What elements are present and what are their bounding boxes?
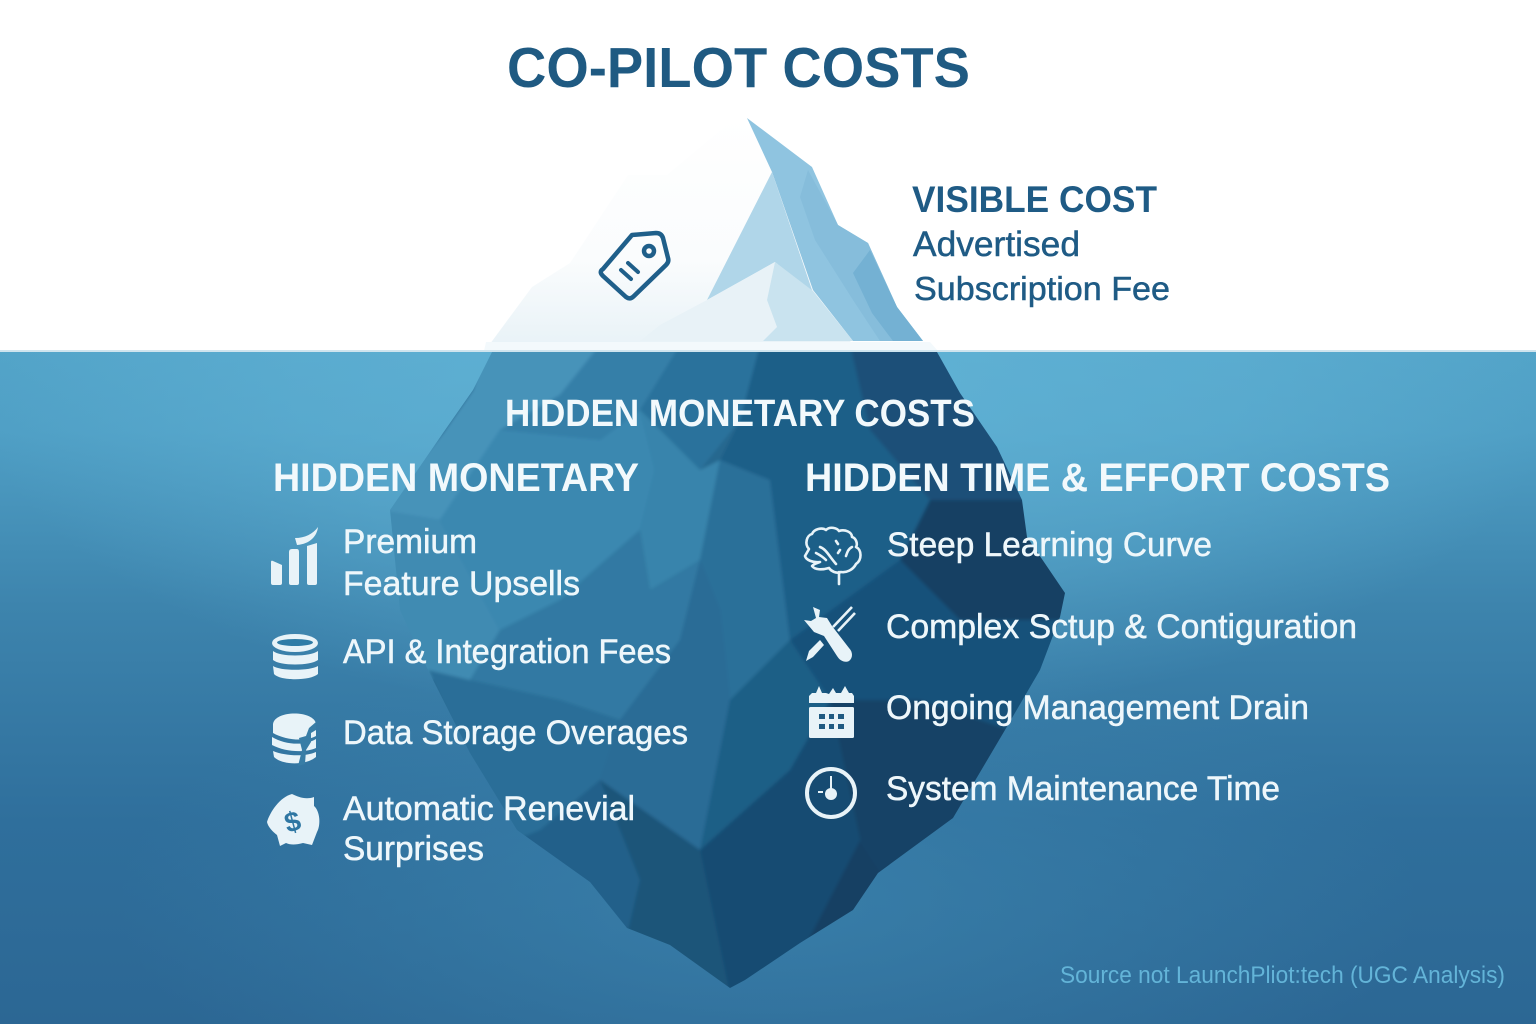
heading: hidden monetary: HIDDEN MONETARY <box>273 456 639 500</box>
visible cost label <box>912 179 1170 307</box>
icon: bar chart <box>271 527 318 585</box>
item: ongoing management drain: Ongoing Management Drain <box>886 689 1309 727</box>
heading: hidden time and effort costs: HIDDEN TIME & EFFORT COSTS <box>805 456 1390 500</box>
item: premium feature upsells: Feature Upsells <box>343 565 580 603</box>
source note: Source not LaunchPliot:tech (UGC Analysis) <box>1060 962 1505 989</box>
icon: piggy bank with dollar <box>267 794 319 846</box>
icon: cracked database <box>272 714 316 766</box>
background: sky <box>0 0 1536 352</box>
icon: brain tree <box>805 528 860 584</box>
icon: clock <box>807 769 855 817</box>
background: ocean water <box>0 350 1536 1024</box>
iceberg under water <box>380 345 1080 995</box>
item: steep learning curve: Steep Learning Curve <box>887 526 1212 564</box>
icon: database <box>272 634 318 679</box>
item: automatic renewal surprises <box>343 790 635 868</box>
panel: hidden time and effort costs <box>804 456 1390 817</box>
iceberg above water <box>484 116 938 351</box>
visible cost label: VISIBLE COST <box>912 179 1157 220</box>
item: complex setup and configuration: Complex Sctup & Contiguration <box>886 608 1357 646</box>
icon: price tag <box>601 233 668 298</box>
item: premium feature upsells: Premium <box>343 523 477 561</box>
panel: hidden monetary <box>267 456 688 868</box>
item: api and integration fees: API & Integration Fees <box>343 633 671 671</box>
item: system maintenance time: System Maintenance Time <box>886 770 1280 808</box>
item: premium feature upsells <box>343 523 580 603</box>
visible cost label: Advertised <box>913 225 1080 264</box>
icon: wrench and screwdriver <box>804 607 855 662</box>
item: automatic renewal surprises: Automatic Renevial <box>343 790 635 828</box>
waterline <box>0 350 1536 352</box>
icon: piggy bank with dollar: $ <box>281 805 304 839</box>
title: CO-PILOT COSTS <box>507 36 970 100</box>
waterline ice shelf <box>484 342 938 351</box>
icon: calendar <box>809 686 854 738</box>
visible cost label: Subscription Fee <box>914 270 1170 307</box>
item: automatic renewal surprises: Surprises <box>343 830 484 868</box>
item: data storage overages: Data Storage Overages <box>343 714 688 752</box>
heading: hidden monetary costs: HIDDEN MONETARY COSTS <box>505 393 975 435</box>
